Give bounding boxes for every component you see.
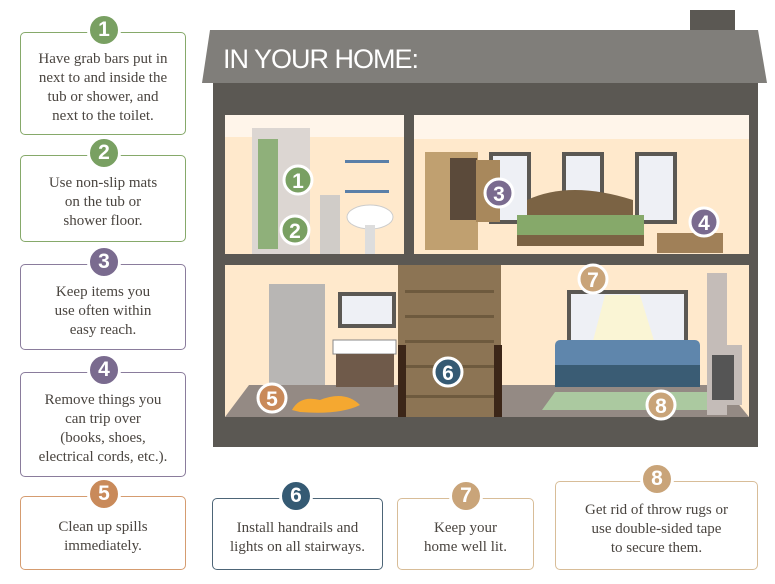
tip 3: use often within: [55, 302, 151, 318]
bathroom: 2: [289, 220, 301, 243]
text: 8: [651, 467, 663, 490]
text: 1: [98, 18, 110, 41]
bedroom: [414, 115, 749, 254]
tip 5: immediately.: [64, 538, 142, 554]
bathroom: 1: [292, 170, 304, 193]
downstairs: 7: [587, 269, 599, 292]
tip 3: easy reach.: [70, 322, 136, 338]
tip 1: tub or shower, and: [47, 88, 159, 104]
tip 8: to secure them.: [611, 540, 702, 556]
tip 6: Install handrails and: [237, 520, 358, 536]
tip 8: use double-sided tape: [592, 521, 721, 537]
text: 4: [98, 358, 110, 381]
tip 4: electrical cords, etc.).: [39, 448, 167, 464]
roof: IN YOUR HOME:: [223, 44, 418, 74]
tip 1: Have grab bars put in: [38, 50, 168, 66]
tip 2: on the tub or: [65, 194, 141, 210]
text: 6: [290, 484, 302, 507]
tip 4: (books, shoes,: [60, 430, 146, 446]
downstairs: 5: [266, 388, 278, 411]
tip 4: [20, 372, 186, 477]
tip 1: next to the toilet.: [52, 108, 154, 124]
tip 2: [20, 155, 186, 242]
downstairs: 6: [442, 362, 454, 385]
text: 2: [98, 141, 110, 164]
text: 3: [98, 250, 110, 273]
downstairs: 8: [655, 395, 667, 418]
house body: [213, 83, 758, 447]
tip 2: Use non-slip mats: [49, 175, 157, 191]
downstairs: [225, 265, 749, 419]
tip 3: [20, 264, 186, 350]
tip 1: [20, 32, 186, 135]
tip 6: lights on all stairways.: [230, 539, 365, 555]
bedroom: 3: [493, 183, 505, 206]
bedroom: 4: [698, 212, 710, 235]
tip 2: shower floor.: [63, 213, 143, 229]
tip 8: Get rid of throw rugs or: [585, 502, 728, 518]
tip 4: Remove things you: [45, 392, 161, 408]
tip 6: [212, 498, 383, 570]
tip 5: Clean up spills: [58, 519, 148, 535]
tip 7: home well lit.: [424, 539, 507, 555]
text: 5: [98, 482, 110, 505]
tip 7: Keep your: [434, 520, 497, 536]
text: 7: [460, 484, 472, 507]
tip 7: [397, 498, 534, 570]
bathroom: [225, 115, 404, 254]
tip 5: [20, 496, 186, 570]
tip 8: [555, 481, 758, 570]
tip 4: can trip over: [65, 410, 141, 426]
roof: [202, 30, 767, 83]
chimney: [690, 10, 735, 32]
tip 1: next to and inside the: [39, 70, 167, 86]
tip 3: Keep items you: [56, 284, 150, 300]
